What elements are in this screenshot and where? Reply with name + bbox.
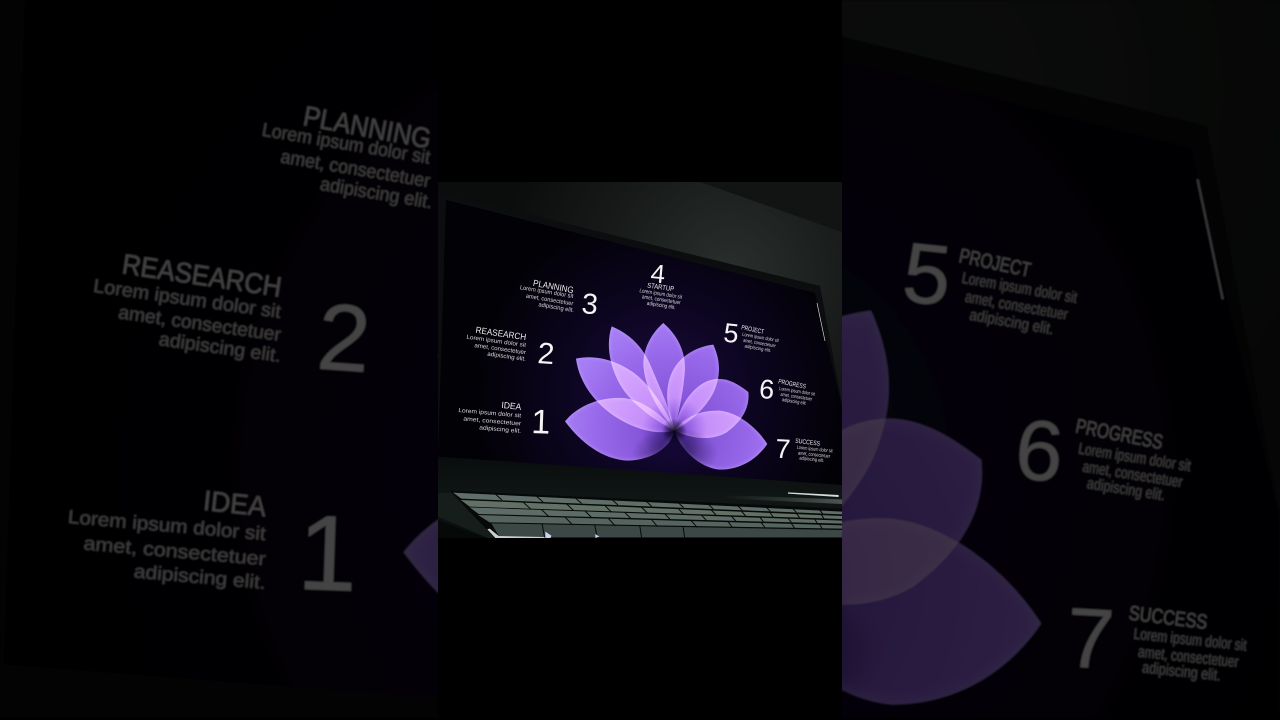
label 1: idea [458, 402, 548, 434]
lotus diagram [565, 323, 767, 478]
label 5: project: 5 [722, 318, 740, 349]
label 1: idea: 1 [531, 403, 551, 442]
blurred enlarged backdrop of the laptop scene: PLANNING [301, 100, 434, 155]
blurred enlarged backdrop of the laptop scene: adipiscing elit. [1086, 475, 1166, 504]
label 3: planning: amet, consectetuer [525, 294, 574, 307]
label 7: success: SUCCESS [795, 438, 821, 448]
label 5: project: amet, consectetuer [743, 338, 776, 350]
label 2: research: 2 [537, 337, 555, 371]
laptop base and keyboard [438, 457, 842, 538]
label 7: success: amet, consectetuer [798, 451, 830, 460]
blurred enlarged backdrop of the laptop scene: adipiscing elit. [158, 329, 282, 367]
label 2: research: amet, consectetuer [474, 343, 526, 356]
label 5: project: adipiscing elit. [744, 344, 772, 354]
blurred enlarged backdrop of the laptop scene: amet, consectetuer [279, 147, 432, 192]
label 4: startup: Lorem ipsum dolor sit [639, 288, 683, 301]
blurred enlarged backdrop of the laptop scene: 7 [1064, 591, 1116, 688]
label 1: idea: IDEA [501, 400, 522, 412]
label 4: startup [640, 265, 682, 310]
label 3: planning [520, 280, 597, 314]
blurred enlarged backdrop of the laptop scene: amet, consectetuer [1081, 459, 1184, 491]
blurred enlarged backdrop of the laptop scene: adipiscing elit. [133, 561, 267, 594]
label 6: progress: 6 [758, 374, 776, 405]
label 6: progress: Lorem ipsum dolor sit [779, 386, 816, 398]
label 5: project: Lorem ipsum dolor sit [742, 332, 780, 344]
centre image: laptop photo [438, 182, 842, 538]
label 4: startup: adipiscing elit. [646, 301, 676, 311]
label 7: success: 7 [775, 434, 791, 464]
label 4: startup: 4 [649, 258, 667, 289]
label 3: planning: adipiscing elit. [538, 302, 575, 314]
blurred enlarged backdrop of the laptop scene: 6 [1012, 402, 1067, 501]
label 2: research: adipiscing elit. [487, 352, 527, 363]
label 6: progress [760, 379, 815, 405]
label 3: planning: PLANNING [532, 278, 574, 295]
blurred enlarged backdrop of the laptop scene: Lorem ipsum dolor sit [92, 276, 283, 323]
blurred enlarged backdrop of the laptop scene: amet, consectetuer [117, 302, 282, 346]
label 5: project: PROJECT [741, 324, 765, 336]
label 2: research [466, 326, 553, 364]
blurred enlarged backdrop of the laptop scene: Lorem ipsum dolor sit [260, 120, 432, 169]
label 4: startup: STARTUP [647, 283, 675, 293]
blurred enlarged backdrop of the laptop scene: PROJECT [957, 244, 1033, 282]
blurred enlarged backdrop of the laptop scene: Lorem ipsum dolor sit [67, 507, 267, 545]
label 5: project [724, 323, 779, 352]
label 7: success [777, 438, 833, 462]
label 6: progress: amet, consectetuer [780, 392, 813, 403]
label 3: planning: 3 [580, 288, 599, 321]
label 2: research: Lorem ipsum dolor sit [466, 335, 527, 349]
blurred enlarged backdrop of the laptop scene: amet, consectetuer [83, 533, 267, 570]
blurred enlarged backdrop of the laptop scene: adipiscing elit. [968, 307, 1055, 338]
blurred enlarged backdrop of the laptop scene: IDEA [202, 485, 268, 523]
blurred enlarged backdrop of the laptop scene: 5 [899, 225, 956, 325]
label 1: idea: Lorem ipsum dolor sit [458, 408, 522, 420]
blurred enlarged backdrop of the laptop scene: SUCCESS [1128, 602, 1209, 634]
blurred enlarged backdrop of the laptop scene: adipiscing elit. [318, 174, 434, 213]
blurred enlarged backdrop of the laptop scene: 1 [296, 492, 360, 614]
blurred enlarged backdrop of the laptop scene: Lorem ipsum dolor sit [1077, 441, 1192, 475]
lid edge highlight [817, 303, 825, 341]
label 4: startup: amet, consectetuer [641, 294, 681, 306]
blurred enlarged backdrop of the laptop scene: 2 [314, 284, 374, 393]
label 6: progress: PROGRESS [778, 378, 807, 391]
label 7: success: Lorem ipsum dolor sit [796, 445, 833, 455]
label 1: idea: adipiscing elit. [479, 425, 522, 435]
laptop lid and wall behind it [438, 182, 842, 502]
blurred enlarged backdrop of the laptop scene: REASEARCH [120, 248, 284, 304]
label 7: success: adipiscing elit. [799, 456, 825, 464]
label 3: planning: Lorem ipsum dolor sit [519, 285, 574, 300]
label 6: progress: adipiscing elit. [781, 397, 807, 407]
blurred enlarged backdrop of the laptop scene: amet, consectetuer [1137, 644, 1239, 671]
blurred enlarged backdrop of the laptop scene: Lorem ipsum dolor sit [1133, 626, 1248, 655]
blurred enlarged backdrop of the laptop scene: adipiscing elit. [1141, 659, 1221, 685]
blurred enlarged backdrop of the laptop scene: amet, consectetuer [964, 289, 1069, 324]
blurred enlarged backdrop of the laptop scene: PROGRESS [1074, 415, 1165, 454]
label 1: idea: amet, consectetuer [463, 416, 521, 427]
blurred enlarged backdrop of the laptop scene: Lorem ipsum dolor sit [961, 270, 1079, 307]
label 2: research: REASEARCH [475, 325, 527, 342]
black column behind the centre image [438, 0, 842, 720]
